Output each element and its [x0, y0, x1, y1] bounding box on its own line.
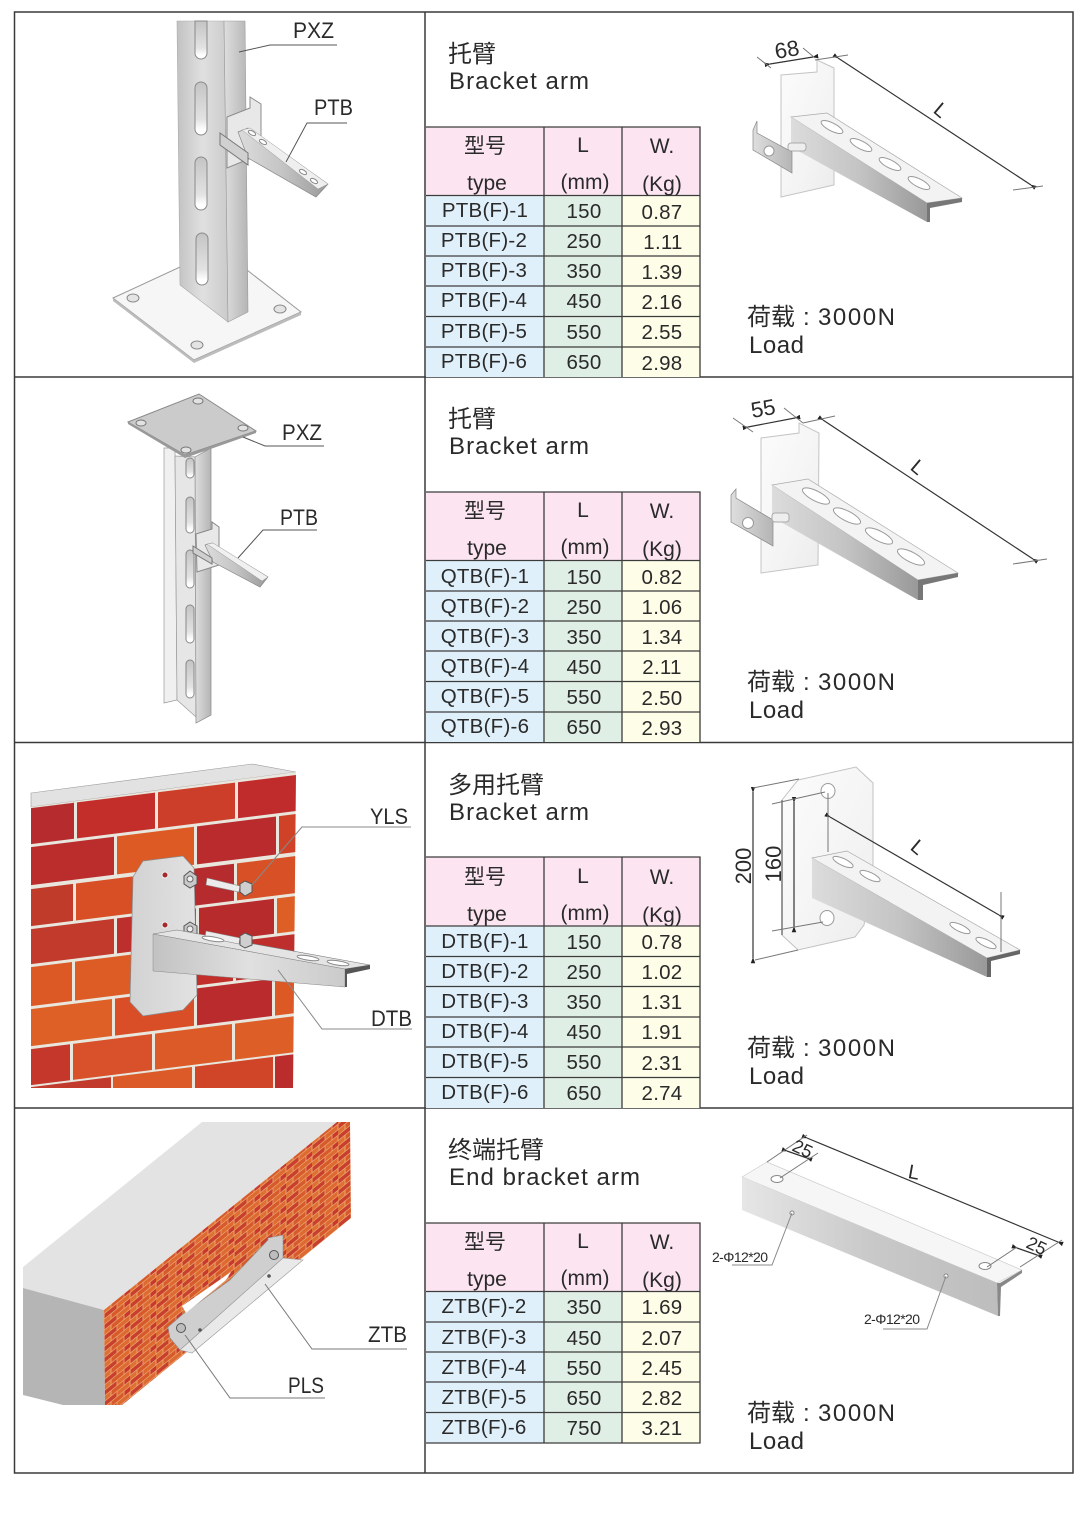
table: DTB(F) specifications: L	[577, 865, 589, 888]
diagram: bracket dimensions, 200, 160 and L: 200	[731, 848, 756, 884]
load note: Load	[749, 1063, 804, 1090]
table: PTB(F) specifications: PTB(F)-6	[441, 350, 527, 373]
load note: 荷载	[747, 304, 795, 331]
label: PTB	[238, 505, 318, 558]
table: ZTB(F) specifications: 450	[567, 1327, 601, 1350]
table: ZTB(F) specifications: ZTB(F)-3	[441, 1326, 527, 1349]
table: QTB(F) specifications: 250	[567, 596, 601, 619]
table: DTB(F) specifications: 1.02	[642, 961, 682, 984]
panel: row 2 ceiling-mounted post	[128, 394, 1047, 742]
table: DTB(F) specifications	[426, 857, 700, 1108]
illustration: ceiling post with top plate and PTB bracket	[128, 394, 268, 723]
diagram: bracket dimensions, 200, 160 and L: 160	[761, 846, 786, 882]
table: QTB(F) specifications: W.	[650, 500, 674, 523]
table: DTB(F) specifications: DTB(F)-1	[441, 930, 529, 953]
table: QTB(F) specifications: (mm)	[561, 536, 609, 559]
panel: row 1 floor-mounted post	[113, 18, 1043, 377]
label: PTB: PTB	[314, 95, 353, 120]
table: ZTB(F) specifications: type	[467, 1268, 507, 1291]
title: bracket arm	[448, 41, 589, 95]
load note	[747, 1035, 895, 1090]
table: QTB(F) specifications: 150	[567, 566, 601, 589]
diagram: bracket arm dimensions, 55 and L: L	[906, 456, 929, 480]
title: end bracket arm	[448, 1137, 640, 1191]
table: DTB(F) specifications: DTB(F)-6	[441, 1081, 529, 1104]
illustration: brick wall with DTB bracket and YLS bolts	[30, 764, 370, 1088]
table: PTB(F) specifications: PTB(F)-2	[441, 229, 527, 252]
label: ZTB: ZTB	[368, 1322, 407, 1347]
label: PXZ: PXZ	[282, 420, 322, 445]
load note: Load	[749, 1428, 804, 1455]
table: QTB(F) specifications: (Kg)	[642, 538, 682, 561]
table: ZTB(F) specifications: 550	[567, 1357, 601, 1380]
diagram: end bracket dimensions, 25, L and hole callouts: L	[906, 1161, 921, 1185]
table: QTB(F) specifications: QTB(F)-1	[441, 565, 529, 588]
table: QTB(F) specifications: 650	[567, 716, 601, 739]
callout: left hole size: 2-Φ12*20	[712, 1249, 768, 1265]
diagram: bracket arm dimensions, 55 and L	[731, 394, 1047, 600]
diagram: bracket arm dimensions, 68 and L	[753, 35, 1043, 222]
table: QTB(F) specifications: 1.34	[642, 626, 682, 649]
table: PTB(F) specifications: (mm)	[561, 171, 609, 194]
title: multi-purpose bracket arm: 多用托臂	[448, 772, 544, 799]
table: ZTB(F) specifications: ZTB(F)-5	[441, 1386, 527, 1409]
table: PTB(F) specifications: PTB(F)-3	[441, 259, 527, 282]
table: QTB(F) specifications: 550	[567, 686, 601, 709]
table: DTB(F) specifications: W.	[650, 866, 674, 889]
table: QTB(F) specifications: QTB(F)-2	[441, 595, 529, 618]
load note: 荷载	[747, 1400, 795, 1427]
table: PTB(F) specifications: L	[577, 134, 589, 157]
label: PTB: PTB	[280, 505, 318, 530]
table: DTB(F) specifications: (Kg)	[642, 904, 682, 927]
table: QTB(F) specifications: QTB(F)-6	[441, 715, 529, 738]
table: QTB(F) specifications: 350	[567, 626, 601, 649]
table: PTB(F) specifications: 550	[567, 321, 601, 344]
title: end bracket arm: 终端托臂	[448, 1137, 544, 1164]
table: PTB(F) specifications: PTB(F)-4	[441, 289, 527, 312]
table: QTB(F) specifications: 0.82	[642, 566, 682, 589]
table: QTB(F) specifications: L	[577, 499, 589, 522]
title: end bracket arm: End bracket arm	[449, 1164, 640, 1191]
table: QTB(F) specifications: QTB(F)-3	[441, 625, 529, 648]
table: PTB(F) specifications: (Kg)	[642, 173, 682, 196]
table: DTB(F) specifications: 2.31	[642, 1052, 682, 1075]
table: DTB(F) specifications: DTB(F)-4	[441, 1020, 529, 1043]
table: QTB(F) specifications: 2.93	[642, 717, 682, 740]
table: ZTB(F) specifications: 2.45	[642, 1357, 682, 1380]
table: ZTB(F) specifications: ZTB(F)-6	[441, 1416, 527, 1439]
table: ZTB(F) specifications: 2.82	[642, 1387, 682, 1410]
table: QTB(F) specifications	[426, 492, 700, 742]
load note: :	[803, 669, 810, 696]
load note: :	[803, 1400, 810, 1427]
illustration: wall block with ZTB end bracket and PLS bolts	[23, 1122, 351, 1405]
table: DTB(F) specifications: 350	[567, 991, 601, 1014]
table: ZTB(F) specifications: 1.69	[642, 1296, 682, 1319]
table: ZTB(F) specifications: ZTB(F)-4	[441, 1356, 527, 1379]
label: YLS	[252, 804, 411, 885]
table: ZTB(F) specifications: 2.07	[642, 1327, 682, 1350]
title: multi-purpose bracket arm	[448, 772, 589, 826]
callout: right hole size: 2-Φ12*20	[864, 1311, 920, 1327]
table: ZTB(F) specifications: (Kg)	[642, 1269, 682, 1292]
table: QTB(F) specifications: QTB(F)-4	[441, 655, 529, 678]
load note	[747, 669, 895, 724]
table: ZTB(F) specifications: 350	[567, 1296, 601, 1319]
load note	[747, 1400, 895, 1455]
load note: :	[803, 304, 810, 331]
table: QTB(F) specifications: 2.50	[642, 687, 682, 710]
table: DTB(F) specifications: 1.91	[642, 1021, 682, 1044]
diagram: bracket dimensions, 200, 160 and L: L	[906, 836, 929, 860]
table: QTB(F) specifications: QTB(F)-5	[441, 685, 529, 708]
label: PTB	[286, 95, 353, 162]
title: bracket arm: 托臂	[448, 406, 496, 433]
table: ZTB(F) specifications: W.	[650, 1231, 674, 1254]
title: bracket arm: Bracket arm	[449, 68, 589, 95]
title: bracket arm: 托臂	[448, 41, 496, 68]
diagram: bracket arm dimensions, 68 and L: 68	[773, 35, 801, 64]
callout: right hole size	[864, 1276, 946, 1329]
label: PLS	[185, 1335, 325, 1398]
table: PTB(F) specifications: 2.55	[642, 321, 682, 344]
table: DTB(F) specifications: 650	[567, 1082, 601, 1105]
callout: left hole size	[712, 1213, 792, 1265]
diagram: end bracket dimensions, 25, L and hole callouts	[742, 1135, 1062, 1316]
diagram: bracket arm dimensions, 55 and L: 55	[749, 394, 777, 423]
load note: 荷载	[747, 669, 795, 696]
diagram: bracket dimensions, 200, 160 and L	[731, 767, 1020, 977]
table: PTB(F) specifications: 350	[567, 260, 601, 283]
table: DTB(F) specifications: 150	[567, 931, 601, 954]
table: ZTB(F) specifications: 3.21	[642, 1417, 682, 1440]
table: ZTB(F) specifications	[426, 1223, 700, 1443]
table: PTB(F) specifications: type	[467, 172, 507, 195]
table: DTB(F) specifications: 2.74	[642, 1082, 682, 1105]
load note: 3000N	[818, 1400, 895, 1427]
load note: Load	[749, 332, 804, 359]
table: PTB(F) specifications: 250	[567, 230, 601, 253]
table: DTB(F) specifications: 1.31	[642, 991, 682, 1014]
table: PTB(F) specifications: 2.98	[642, 352, 682, 375]
label: PXZ	[239, 18, 337, 52]
table: PTB(F) specifications: 1.39	[642, 261, 682, 284]
table: PTB(F) specifications: 0.87	[642, 201, 682, 224]
title: multi-purpose bracket arm: Bracket arm	[449, 799, 589, 826]
table: DTB(F) specifications: type	[467, 903, 507, 926]
label: DTB: DTB	[371, 1006, 412, 1031]
panel: row 4 end bracket arm	[23, 1122, 1062, 1455]
table: DTB(F) specifications: DTB(F)-3	[441, 990, 529, 1013]
table: ZTB(F) specifications: 型号	[464, 1231, 506, 1254]
load note: 3000N	[818, 304, 895, 331]
table: PTB(F) specifications: PTB(F)-1	[442, 199, 528, 222]
table: DTB(F) specifications: 0.78	[642, 931, 682, 954]
label: ZTB	[265, 1284, 407, 1349]
table: DTB(F) specifications: DTB(F)-5	[441, 1050, 529, 1073]
table: DTB(F) specifications: 550	[567, 1051, 601, 1074]
table: DTB(F) specifications: 450	[567, 1021, 601, 1044]
label: DTB	[278, 970, 412, 1031]
table: QTB(F) specifications: 2.11	[642, 656, 682, 679]
table: PTB(F) specifications: 150	[567, 200, 601, 223]
table: PTB(F) specifications: 450	[567, 290, 601, 313]
table: QTB(F) specifications: 450	[567, 656, 601, 679]
illustration: floor post with base plate and PTB bracket	[113, 21, 328, 363]
load note: :	[803, 1035, 810, 1062]
load note	[747, 304, 895, 359]
table: QTB(F) specifications: type	[467, 537, 507, 560]
table: PTB(F) specifications: W.	[650, 135, 674, 158]
table: ZTB(F) specifications: 750	[567, 1417, 601, 1440]
load note: 3000N	[818, 669, 895, 696]
table: ZTB(F) specifications: L	[577, 1230, 589, 1253]
table: ZTB(F) specifications: 650	[567, 1387, 601, 1410]
table: DTB(F) specifications: (mm)	[561, 902, 609, 925]
table: PTB(F) specifications: PTB(F)-5	[441, 320, 527, 343]
table: DTB(F) specifications: 250	[567, 961, 601, 984]
table: QTB(F) specifications: 1.06	[642, 596, 682, 619]
panel: row 3 wall-mounted bracket	[20, 764, 1020, 1128]
diagram: bracket arm dimensions, 68 and L: L	[929, 99, 952, 123]
table: DTB(F) specifications: DTB(F)-2	[441, 960, 529, 983]
label: PXZ: PXZ	[293, 18, 334, 43]
load note: 3000N	[818, 1035, 895, 1062]
table: PTB(F) specifications: 2.16	[642, 291, 682, 314]
table: PTB(F) specifications: 1.11	[643, 231, 683, 254]
diagram: end bracket dimensions, 25, L and hole callouts: 25	[1023, 1233, 1050, 1259]
table: PTB(F) specifications	[426, 127, 700, 377]
diagram: end bracket dimensions, 25, L and hole callouts: 25	[789, 1136, 816, 1162]
load note: 荷载	[747, 1035, 795, 1062]
label: PXZ	[243, 420, 324, 446]
table: PTB(F) specifications: 650	[567, 351, 601, 374]
label: YLS: YLS	[370, 804, 408, 829]
title: bracket arm	[448, 406, 589, 460]
table: DTB(F) specifications: 型号	[464, 866, 506, 889]
table: ZTB(F) specifications: ZTB(F)-2	[441, 1295, 527, 1318]
label: PLS: PLS	[288, 1373, 324, 1398]
table: ZTB(F) specifications: (mm)	[561, 1267, 609, 1290]
load note: Load	[749, 697, 804, 724]
table: PTB(F) specifications: 型号	[464, 135, 506, 158]
table: QTB(F) specifications: 型号	[464, 500, 506, 523]
title: bracket arm: Bracket arm	[449, 433, 589, 460]
